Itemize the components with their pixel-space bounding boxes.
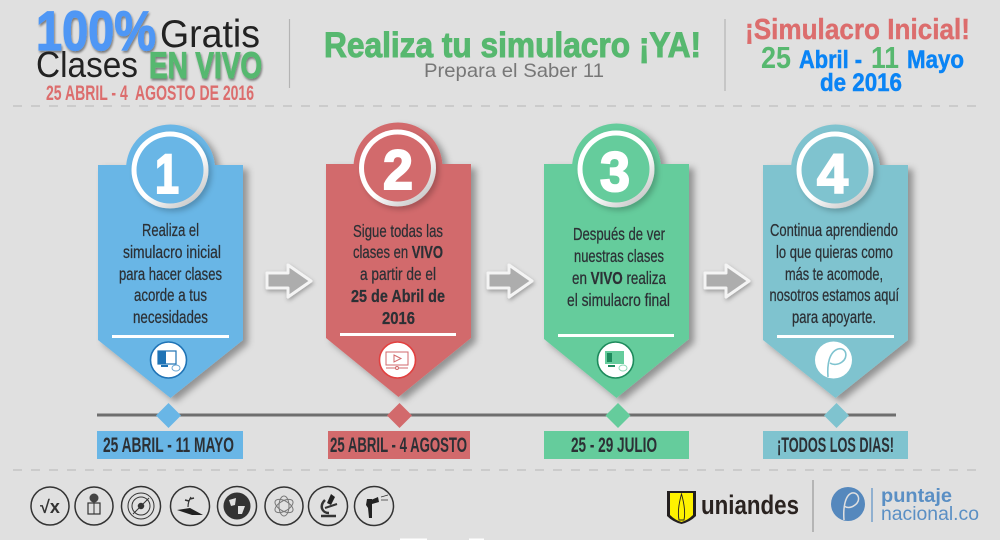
icon: telescope viewer — [354, 486, 394, 526]
number badge: 2 — [383, 138, 413, 201]
step text — [351, 221, 445, 328]
banner — [763, 124, 908, 398]
step text: a partir de el — [360, 264, 436, 284]
step text: 2016 — [382, 308, 415, 328]
step text: nosotros estamos aquí — [770, 285, 899, 305]
icon: math — [31, 487, 69, 525]
heading: Simulacro Inicial: ¡Simulacro Inicial! — [745, 14, 970, 46]
wordmark: nacional.co: nacional.co — [881, 504, 979, 525]
icon: atom — [265, 487, 303, 525]
panel: step 3 — [544, 124, 689, 459]
banner — [326, 122, 471, 397]
icon: reading — [75, 487, 113, 525]
wordmark: uniandes — [701, 490, 799, 520]
step text: necesidades — [133, 307, 208, 327]
step text: 25 de Abril de — [351, 286, 445, 306]
step text: Sigue todas las — [353, 221, 443, 241]
arrow: step 1 to 2 — [267, 265, 311, 297]
date label — [763, 431, 908, 459]
subheading: Prepara el Saber 11 — [424, 60, 604, 82]
timeline marker — [606, 403, 630, 428]
step text: clases en VIVO — [353, 242, 443, 262]
step text: acorde a tus — [134, 285, 207, 305]
timeline marker — [824, 403, 849, 428]
panel: step 4 — [763, 124, 908, 459]
header: initial mock test dates — [745, 14, 970, 97]
date label — [97, 431, 243, 459]
icon: puntaje logo — [815, 342, 852, 378]
timeline axis — [97, 414, 896, 416]
number badge: 4 — [817, 142, 848, 205]
date label — [544, 431, 689, 459]
date text de 2016: de 2016 — [820, 69, 902, 97]
number badge: 3 — [600, 140, 630, 203]
step text: para apoyarte. — [792, 307, 876, 327]
step text: simulacro inicial — [123, 242, 221, 262]
timeline marker — [387, 403, 412, 428]
emblem — [831, 487, 865, 521]
number badge: 1 — [155, 142, 179, 205]
date label: 25 - 29 JULIO — [571, 434, 657, 457]
number badge — [359, 130, 436, 206]
step text: para hacer clases — [119, 264, 222, 284]
timeline marker — [156, 403, 181, 428]
number badge — [796, 132, 874, 208]
icon: presenter on screen — [150, 342, 186, 378]
icon: globe — [218, 486, 256, 526]
step text — [770, 220, 899, 327]
date label: ¡TODOS LOS DIAS! — [777, 434, 894, 457]
logo: uniandes — [667, 490, 799, 524]
date label: 25 ABRIL - 4 AGOSTO — [330, 434, 467, 457]
step text — [119, 220, 222, 327]
heading: EN VIVO: EN VIVO — [149, 45, 262, 86]
step text: Después de ver — [573, 224, 665, 244]
icon: math: √x — [40, 497, 60, 517]
arrow: step 3 to 4 — [705, 265, 749, 297]
icon: presenter on screen — [598, 342, 634, 378]
shield — [667, 491, 696, 524]
subject icons row — [31, 486, 394, 526]
icon: microscope — [308, 486, 348, 526]
icon: plant in hand — [170, 486, 210, 526]
date text Mayo: Mayo — [907, 46, 964, 74]
heading: Realiza tu simulacro: Realiza tu simulacro ¡YA! — [324, 26, 701, 65]
header: call to action — [324, 26, 701, 82]
banner — [98, 124, 243, 398]
icon: video player — [380, 342, 416, 378]
date number 11: 11 — [871, 40, 899, 75]
step text: en VIVO realiza — [572, 268, 666, 288]
date label — [328, 431, 470, 459]
wordmark: puntaje: puntaje — [881, 486, 952, 507]
icon: compass — [122, 486, 160, 526]
arrow: step 2 to 3 — [488, 265, 532, 297]
step text: nuestras clases — [574, 246, 664, 266]
header: free live classes — [36, 0, 262, 105]
date number 25: 25 — [761, 40, 791, 75]
heading: Clases: Clases — [36, 44, 138, 85]
panel: step 1 — [97, 124, 243, 459]
date label: 25 ABRIL - 11 MAYO — [103, 434, 234, 457]
date range: 25 ABRIL - 4 AGOSTO DE 2016 — [46, 82, 254, 105]
step text: más te acomode, — [785, 264, 883, 284]
step text: el simulacro final — [567, 290, 670, 310]
heading: Gratis: Gratis — [160, 13, 260, 56]
step text — [567, 224, 670, 310]
logo: puntaje nacional — [831, 486, 979, 525]
number badge — [132, 132, 208, 208]
step text: Continua aprendiendo — [770, 220, 898, 240]
number badge — [578, 130, 654, 208]
heading: 100%: 100% — [36, 0, 156, 62]
step text: lo que quieras como — [776, 242, 893, 262]
banner — [544, 124, 689, 398]
date text Abril: Abril - — [799, 46, 862, 74]
step text: Realiza el — [142, 220, 199, 240]
panel: step 2 — [326, 122, 471, 459]
